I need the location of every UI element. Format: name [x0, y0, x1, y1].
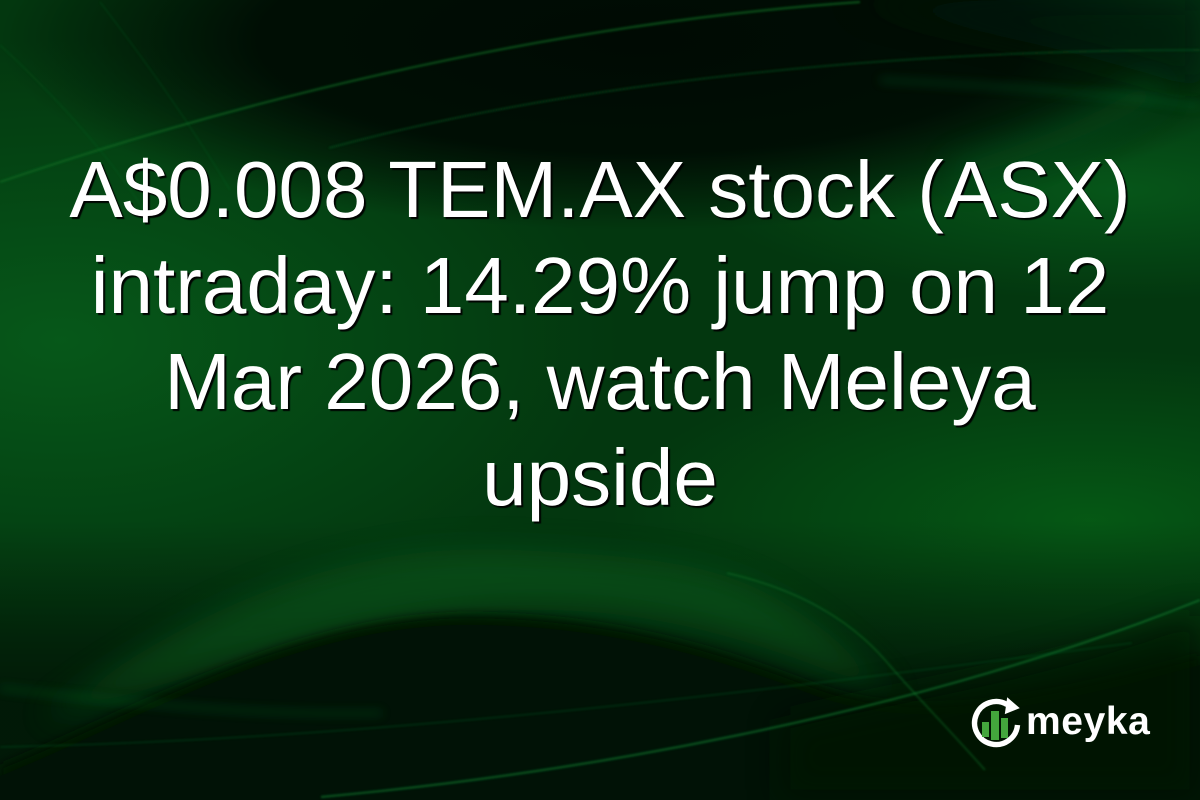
title: Mar 2026, watch Meleya: [164, 337, 1036, 426]
logo: meyka: [972, 697, 1150, 748]
title: intraday: 14.29% jump on 12: [91, 241, 1109, 330]
logo wordmark: meyka: [1026, 700, 1150, 743]
wave band: lighter green above the hill: [40, 549, 900, 720]
dark hill core, keeps the lower edge solid: [0, 625, 1200, 800]
title: upside: [482, 433, 718, 522]
top bright wave: [0, 2, 860, 182]
title: A$0.008 TEM.AX stock (ASX): [69, 145, 1131, 234]
icon: circular arrow with green bars: [972, 697, 1020, 748]
dark lower right corner: [780, 612, 1200, 800]
dark hill at bottom: [0, 615, 1200, 800]
title: [69, 145, 1131, 524]
bottom bright wave: [321, 600, 1200, 797]
